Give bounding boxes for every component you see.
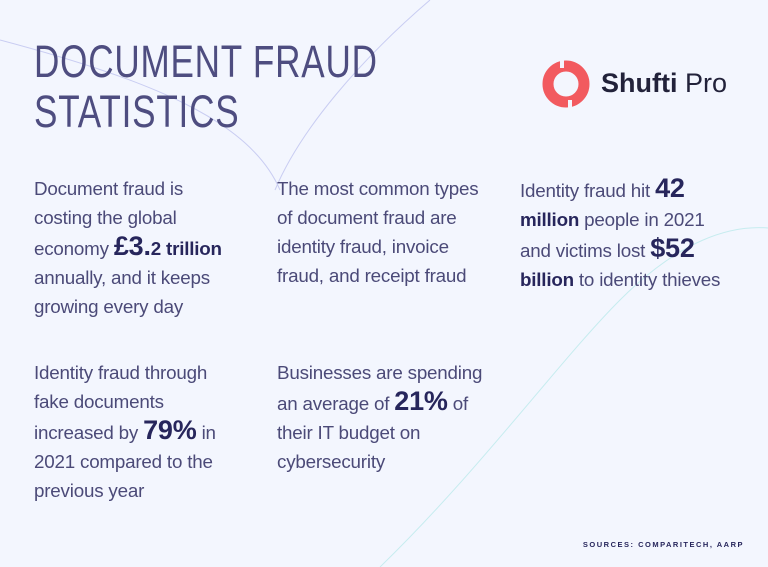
stat 3: Identity fraud hit 42 (520, 173, 685, 203)
icon: logo ring (542, 60, 590, 108)
stat 1: Document fraud is (34, 178, 183, 199)
stat 1 (34, 178, 222, 317)
stat 4: previous year (34, 480, 144, 501)
stat 4: fake documents (34, 391, 164, 412)
stat 5: their IT budget on (277, 422, 420, 443)
stat 3: billion to identity thieves (520, 269, 720, 290)
stat 3: million people in 2021 (520, 209, 705, 230)
logo (542, 60, 727, 108)
stat 2: The most common types (277, 178, 478, 199)
stat 5: Businesses are spending (277, 362, 482, 383)
stat 1: annually, and it keeps (34, 267, 210, 288)
stat 2 (277, 178, 478, 286)
stat 3 (520, 173, 720, 290)
sources: SOURCES: COMPARITECH, AARP (583, 540, 744, 549)
title: STATISTICS (34, 86, 239, 137)
stat 3: and victims lost $52 (520, 233, 695, 263)
stat 2: identity fraud, invoice (277, 236, 449, 257)
title (34, 36, 378, 137)
stat 4: 2021 compared to the (34, 451, 213, 472)
stat 5: an average of 21% of (277, 386, 468, 416)
logo: Shufti Pro (601, 68, 727, 98)
stat 1: growing every day (34, 296, 183, 317)
stat 2: fraud, and receipt fraud (277, 265, 466, 286)
stat 5: cybersecurity (277, 451, 385, 472)
stat 4: Identity fraud through (34, 362, 207, 383)
stat 4: increased by 79% in (34, 415, 216, 445)
stat 1: economy £3.2 trillion (34, 231, 222, 261)
stat 4 (34, 362, 216, 501)
stat 2: of document fraud are (277, 207, 457, 228)
stat 5 (277, 362, 482, 472)
title: DOCUMENT FRAUD (34, 36, 378, 87)
stat 1: costing the global (34, 207, 177, 228)
